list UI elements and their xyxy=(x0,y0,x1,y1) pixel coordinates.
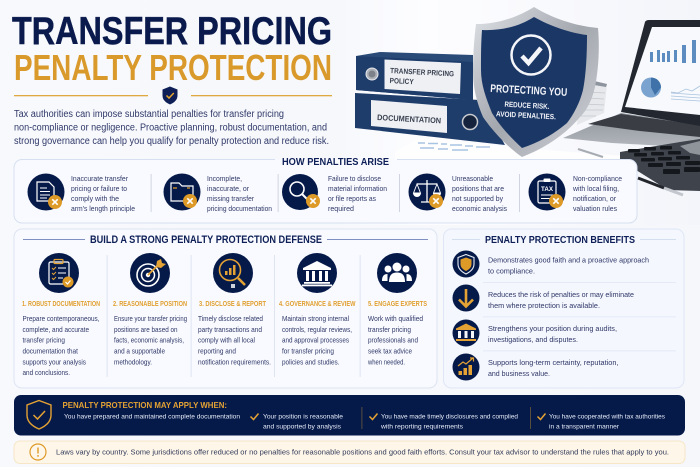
panel: build a strong penalty protection defense xyxy=(14,229,437,388)
column 1: robust documentation: supports your analysis xyxy=(22,358,86,366)
binder: documentation xyxy=(355,93,505,145)
condition 4: in a transparent manner xyxy=(549,424,620,430)
condition 3: with reporting requirements xyxy=(380,424,464,430)
text: incomplete documentation xyxy=(207,174,272,213)
text: incomplete documentation: missing transfer xyxy=(207,194,254,203)
benefit 3: strengthens position xyxy=(452,320,617,346)
condition 2 xyxy=(250,414,343,430)
callout: laws vary by country xyxy=(14,441,685,464)
text: incomplete documentation: inaccurate, or xyxy=(207,184,250,193)
benefit 4: long-term certainty: Supports long-term certainty, reputation, xyxy=(488,358,618,367)
column 2: reasonable position: facts, economic analysis, xyxy=(114,336,184,344)
column 1: robust documentation: documentation that xyxy=(22,346,78,356)
text: inaccurate pricing: Inaccurate transfer xyxy=(71,174,128,183)
text: incomplete documentation: Incomplete, xyxy=(207,174,242,183)
icon: scales with x xyxy=(408,174,446,210)
column 4: governance and review: Maintain strong internal xyxy=(282,314,349,323)
column 2: reasonable position: positions are based on xyxy=(114,325,178,334)
panel: how penalties arise xyxy=(14,156,637,223)
icon: target xyxy=(130,253,170,293)
icon: shield xyxy=(452,250,480,278)
condition 3: You have made timely disclosures and complied xyxy=(381,414,518,420)
title xyxy=(12,10,332,88)
column 5: engage experts: when needed. xyxy=(367,358,405,366)
icon: document with x xyxy=(28,174,64,210)
column 1: robust documentation: 1. ROBUST DOCUMENTATION xyxy=(22,299,100,308)
book stack xyxy=(577,80,607,125)
icon: down arrow xyxy=(452,284,480,312)
icon: title divider with shield xyxy=(14,86,332,104)
shield badge xyxy=(473,7,599,157)
column 5: engage experts: 5. ENGAGE EXPERTS xyxy=(368,299,427,308)
shield text xyxy=(489,83,568,122)
column 4: governance and review xyxy=(279,253,356,366)
column 1: robust documentation: transfer pricing xyxy=(22,336,65,344)
title: PENALTY PROTECTION xyxy=(14,47,332,88)
shield text: REDUCE RISK. xyxy=(504,100,550,111)
text: unreasonable positions: Unreasonable xyxy=(452,174,493,183)
benefit 4: long-term certainty: and business value. xyxy=(488,369,550,378)
column 3: disclose and report: comply with all local xyxy=(198,336,255,344)
text: non-compliance: Non-compliance xyxy=(573,174,622,183)
column 1: robust documentation xyxy=(22,253,100,377)
column 1: robust documentation: Prepare contemporaneous, xyxy=(22,314,100,323)
benefit 1: good faith: Demonstrates good faith and a proactive approach xyxy=(488,256,649,264)
binder: transfer pricing policy: TRANSFER PRICING xyxy=(390,66,454,78)
text: failure to disclose: material information xyxy=(328,184,387,193)
text: inaccurate pricing: arm's length principle xyxy=(71,204,135,213)
condition 2: Your position is reasonable xyxy=(263,414,343,420)
text: inaccurate pricing xyxy=(71,174,135,213)
text: non-compliance: with local filing, xyxy=(572,184,619,193)
column 3: disclose and report: reporting and xyxy=(198,346,236,356)
text: unreasonable positions: positions that are xyxy=(452,184,504,193)
pen xyxy=(638,178,683,195)
icon: institution xyxy=(297,253,337,293)
text: failure to disclose: required xyxy=(328,204,354,213)
heading: benefits: PENALTY PROTECTION BENEFITS xyxy=(485,234,635,246)
column 5: engage experts: transfer pricing xyxy=(368,325,411,334)
column 3: disclose and report: notification requirements. xyxy=(198,358,271,366)
title: TRANSFER PRICING xyxy=(12,10,332,53)
column 2: reasonable position xyxy=(113,253,187,366)
binder: documentation: DOCUMENTATION xyxy=(377,113,441,125)
column 5: engage experts: professionals and xyxy=(368,336,418,344)
icon: warning xyxy=(30,444,46,460)
hero backdrop xyxy=(335,0,700,225)
column 4: governance and review: controls, regular reviews, xyxy=(282,325,352,334)
icon: magnifier with x xyxy=(282,174,320,210)
text: incomplete documentation: pricing documentation xyxy=(207,204,272,213)
icon: institution gold xyxy=(452,320,480,346)
icon: people xyxy=(377,253,417,293)
benefit 1: good faith xyxy=(452,250,649,278)
column 3: disclose and report: Timely disclose related xyxy=(198,314,263,323)
text: failure to disclose: or file reports as xyxy=(328,194,376,203)
text: unreasonable positions: economic analysis xyxy=(452,204,507,213)
column 3: disclose and report: party transactions and xyxy=(198,325,262,334)
icon: growth chart xyxy=(452,354,480,380)
heading: build defense: BUILD A STRONG PENALTY PROTECTION DEFENSE xyxy=(90,234,322,246)
column 2: reasonable position: and a supportable xyxy=(114,346,165,356)
intro paragraph: Tax authorities can impose substantial penalties for transfer pricing xyxy=(14,109,284,120)
text: inaccurate pricing: comply with the xyxy=(71,194,119,203)
condition 2: and supported by analysis xyxy=(263,424,342,430)
benefit 3: strengthens position: Strengthens your position during audits, xyxy=(488,324,617,333)
column 2: reasonable position: methodology. xyxy=(114,358,152,366)
intro paragraph xyxy=(14,109,329,147)
text: non-compliance: valuation rules xyxy=(573,204,617,213)
calculator xyxy=(620,139,700,191)
text: non-compliance xyxy=(572,174,622,213)
icon: tax clipboard with x: TAX xyxy=(541,187,553,193)
condition 3 xyxy=(370,414,518,430)
column 3: disclose and report xyxy=(198,253,271,366)
heading: may apply when: PENALTY PROTECTION MAY APPLY WHEN: xyxy=(62,400,227,410)
text: non-compliance: notification, or xyxy=(573,194,616,203)
benefit 2: reduces risk: them where protection is available. xyxy=(488,301,600,310)
shield text: PROTECTING YOU xyxy=(490,83,568,99)
heading: how penalties arise: HOW PENALTIES ARISE xyxy=(282,156,389,168)
condition 1: You have prepared and maintained complete documentation xyxy=(64,414,240,420)
callout: laws vary by country: Laws vary by country. Some jurisdictions offer reduced or no penalties for reasonable positions and good faith efforts. Consult your tax advisor to understand the rules that apply to you. xyxy=(56,448,669,456)
benefit 4: long-term certainty xyxy=(452,354,618,380)
benefit 2: reduces risk xyxy=(452,284,634,312)
column 2: reasonable position: 2. REASONABLE POSITION xyxy=(113,299,187,308)
binder: transfer pricing policy: POLICY xyxy=(389,76,414,86)
column 1: robust documentation: and conclusions. xyxy=(22,368,70,377)
column 4: governance and review: and approval processes xyxy=(282,336,349,344)
icon: shield check xyxy=(27,400,51,429)
hero illustration xyxy=(335,0,700,225)
shield check icon xyxy=(512,36,550,74)
text: unreasonable positions: not supported by xyxy=(452,194,503,203)
column 5: engage experts xyxy=(367,253,427,366)
icon: magnifier chart xyxy=(213,253,253,293)
banner: penalty protection may apply when xyxy=(14,395,685,436)
benefit 3: strengthens position: investigations, and disputes. xyxy=(488,335,578,344)
intro paragraph: strong governance can help you qualify for penalty protection and reduce risk. xyxy=(14,136,329,147)
panel: penalty protection benefits xyxy=(444,229,684,388)
benefit 2: reduces risk: Reduces the risk of penalties or may eliminate xyxy=(488,290,634,299)
text: failure to disclose xyxy=(328,174,387,213)
column 1: robust documentation: complete, and accurate xyxy=(22,325,89,334)
condition 4: You have cooperated with tax authorities xyxy=(549,414,666,420)
condition 4 xyxy=(538,414,666,430)
column 4: governance and review: 4. GOVERNANCE & REVIEW xyxy=(279,299,356,308)
column 5: engage experts: seek tax advice xyxy=(368,346,412,356)
column 5: engage experts: Work with qualified xyxy=(368,314,423,323)
icon: folder with x xyxy=(164,174,200,210)
shield text: AVOID PENALTIES. xyxy=(496,109,556,121)
text: failure to disclose: Failure to disclose xyxy=(328,174,381,183)
icon: tax clipboard with x xyxy=(528,174,566,210)
icon: checklist clipboard xyxy=(39,253,79,293)
column 3: disclose and report: 3. DISCLOSE & REPORT xyxy=(199,299,266,308)
intro paragraph: non-compliance or negligence. Proactive planning, robust documentation, and xyxy=(14,122,327,134)
paper on desk xyxy=(395,138,625,172)
benefit 1: good faith: to compliance. xyxy=(488,266,535,276)
column 4: governance and review: policies and studies. xyxy=(282,358,340,366)
text: unreasonable positions xyxy=(452,174,507,213)
binder: transfer pricing policy xyxy=(356,52,473,100)
column 4: governance and review: for transfer pricing xyxy=(282,346,334,356)
column 2: reasonable position: Ensure your transfer pricing xyxy=(114,314,187,323)
text: inaccurate pricing: pricing or failure to xyxy=(71,184,127,193)
laptop xyxy=(563,20,700,148)
